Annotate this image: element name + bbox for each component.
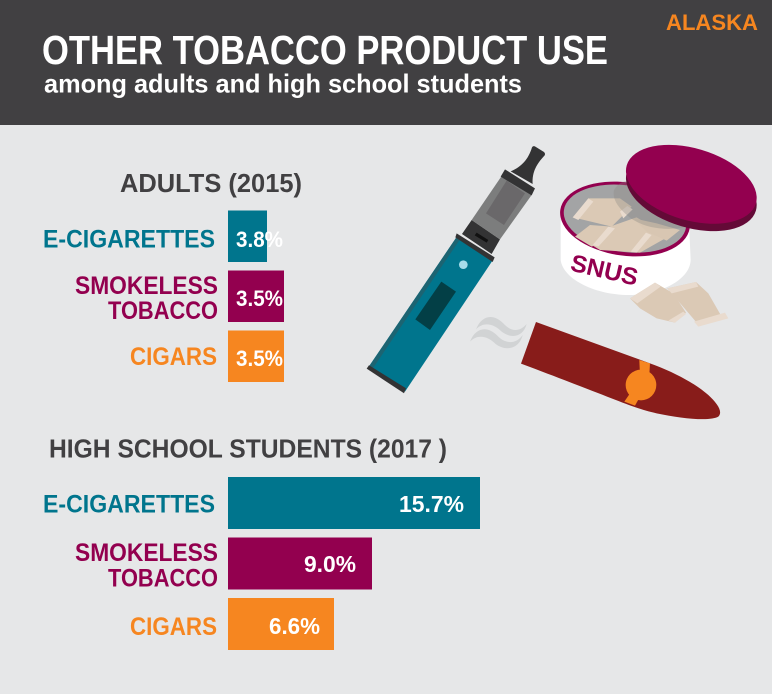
value: 15.7%	[399, 491, 464, 517]
label: smokeless tobacco	[75, 539, 218, 592]
value: 3.5%	[236, 346, 283, 371]
label: cigars: CIGARS	[130, 613, 217, 641]
icon: snus tin	[555, 131, 766, 327]
heading: high school students: HIGH SCHOOL STUDENTS (2017 )	[49, 434, 447, 464]
bar: students cigars	[228, 598, 334, 650]
subtitle: among adults and high school students	[44, 68, 522, 98]
title: OTHER TOBACCO PRODUCT USE	[42, 27, 608, 73]
bar: adults smokeless	[228, 270, 284, 322]
bar: adults cigars	[228, 330, 284, 382]
bar: adults e-cigarettes	[228, 210, 267, 262]
heading: adults: ADULTS (2015)	[120, 168, 302, 198]
label: smokeless tobacco: TOBACCO	[108, 564, 218, 592]
value: 9.0%	[304, 551, 356, 577]
tin label: SNUS	[568, 250, 641, 292]
state label: ALASKA	[666, 10, 758, 35]
value: 3.8%	[236, 227, 283, 252]
panel: high school chart	[43, 434, 480, 650]
header band	[0, 0, 772, 125]
icon: e-cigarette	[367, 146, 545, 393]
label: e-cigarettes: E-CIGARETTES	[43, 490, 215, 518]
value: 6.6%	[269, 613, 320, 639]
label: cigars: CIGARS	[130, 343, 217, 371]
value: 3.5%	[236, 286, 283, 311]
bar: students e-cigarettes	[228, 477, 480, 529]
label: smokeless tobacco: SMOKELESS	[75, 272, 218, 300]
panel: adults chart	[43, 168, 302, 382]
bar: students smokeless	[228, 538, 372, 590]
label: smokeless tobacco	[75, 272, 218, 325]
label: smokeless tobacco: SMOKELESS	[75, 539, 218, 567]
label: smokeless tobacco: TOBACCO	[108, 297, 218, 325]
smoke	[470, 317, 527, 348]
label: e-cigarettes: E-CIGARETTES	[43, 226, 215, 254]
icon: cigar	[470, 317, 720, 419]
